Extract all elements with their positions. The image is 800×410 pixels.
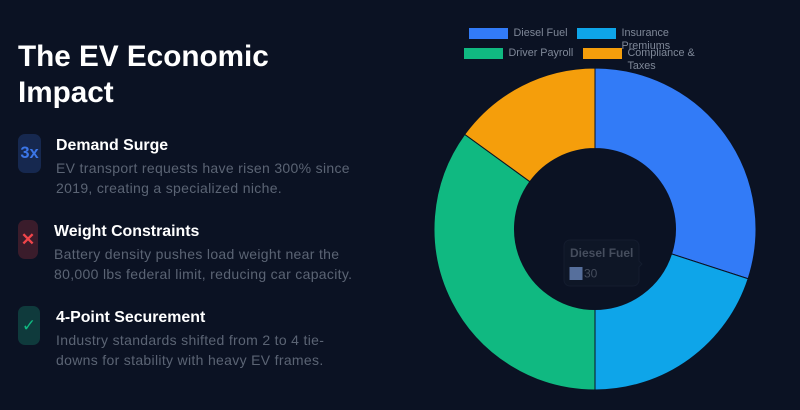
- text: 4-point securement: downs for stability with heavy EV frames.: [56, 352, 324, 368]
- icon: 3x badge: [18, 134, 41, 173]
- text: 4-point securement: [56, 332, 324, 368]
- text: weight constraints: Battery density pushes load weight near the: [54, 246, 339, 262]
- slice: diesel fuel: [595, 68, 756, 279]
- item: demand surge: [18, 134, 350, 196]
- item: weight constraints: [18, 220, 352, 282]
- slice: insurance premiums: [595, 254, 748, 390]
- title: [18, 40, 269, 108]
- heading: weight constraints: Weight Constraints: [54, 223, 199, 240]
- legend: diesel fuel: [469, 27, 568, 39]
- slice: compliance and taxes: [465, 68, 595, 182]
- tooltip title: Diesel Fuel: [570, 246, 633, 260]
- title: Impact: [18, 76, 114, 108]
- legend: diesel fuel: Diesel Fuel: [514, 27, 568, 39]
- legend: compliance and taxes: [583, 47, 696, 72]
- icon: check badge: ✓: [22, 316, 36, 335]
- slice: driver payroll: [434, 134, 595, 390]
- icon: cross badge: [18, 220, 38, 259]
- legend: driver payroll: Driver Payroll: [508, 47, 573, 59]
- text: 4-point securement: Industry standards shifted from 2 to 4 tie-: [56, 332, 324, 348]
- icon: 3x badge: 3x: [20, 144, 39, 162]
- tooltip value: 30: [584, 266, 598, 280]
- tooltip swatch: [570, 267, 582, 280]
- legend: insurance premiums: Premiums: [622, 40, 671, 52]
- title: The EV Economic: [18, 40, 269, 73]
- text: demand surge: 2019, creating a specialized niche.: [56, 180, 282, 196]
- icon: cross badge: ✕: [21, 230, 35, 249]
- text: demand surge: [56, 160, 350, 196]
- tooltip: [564, 240, 642, 286]
- legend: driver payroll: [464, 47, 573, 59]
- legend: insurance premiums: [577, 27, 671, 52]
- item: 4-point securement: [18, 306, 324, 368]
- legend: compliance and taxes: Compliance &: [628, 47, 696, 59]
- heading: demand surge: Demand Surge: [56, 137, 168, 154]
- legend: insurance premiums: Insurance: [622, 27, 669, 39]
- text: weight constraints: [54, 246, 352, 282]
- text: demand surge: EV transport requests have risen 300% since: [56, 160, 350, 176]
- heading: 4-point securement: 4-Point Securement: [56, 309, 205, 326]
- legend: compliance and taxes: Taxes: [628, 60, 656, 72]
- icon: check badge: [18, 306, 40, 345]
- legend: [464, 27, 696, 72]
- text: weight constraints: 80,000 lbs federal limit, reducing car capacity.: [54, 266, 352, 282]
